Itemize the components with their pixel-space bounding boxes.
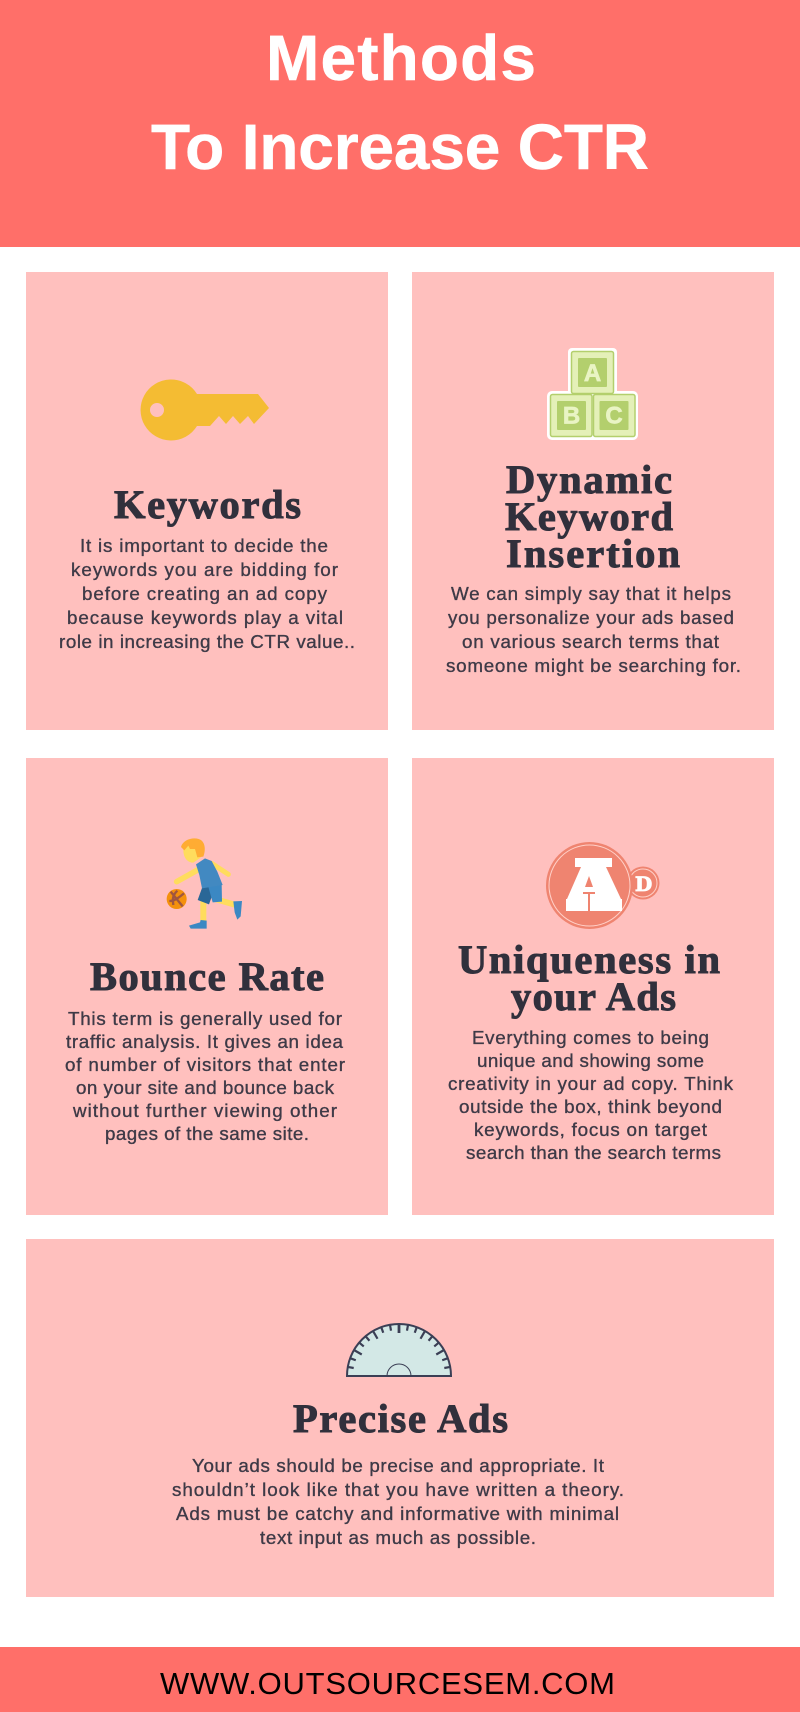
footer website: WWW.OUTSOURCESEM.COM: [160, 1666, 615, 1701]
heading: Dynamic Keyword Insertion: Dynamic: [506, 457, 672, 502]
text: uniqueness description: Everything comes to being: [472, 1027, 709, 1048]
text: bounce rate description: pages of the same site.: [105, 1123, 309, 1144]
text: keywords description: before creating an ad copy: [82, 583, 328, 604]
icon: key: [141, 379, 269, 440]
heading: Uniqueness in your Ads: Uniqueness in: [458, 937, 720, 982]
title: To Increase CTR: [151, 111, 649, 183]
title: Methods: [266, 22, 536, 94]
text: keywords description: It is important to decide the: [80, 535, 328, 556]
icon: ABC blocks: A: [584, 360, 601, 387]
heading: Uniqueness in your Ads: your Ads: [511, 974, 676, 1019]
text: uniqueness description: creativity in your ad copy. Think: [448, 1073, 734, 1094]
text: bounce rate description: [65, 1008, 345, 1144]
heading: Bounce Rate: Bounce Rate: [90, 954, 324, 999]
icon: Ad badge: D: [635, 872, 652, 896]
heading: Keywords: Keywords: [114, 482, 301, 527]
text: keywords description: [59, 535, 355, 652]
text: keywords description: role in increasing the CTR value..: [59, 631, 355, 652]
header banner: [0, 0, 800, 247]
panel: keywords: [26, 272, 388, 730]
icon: ABC blocks: C: [605, 402, 623, 430]
panel: uniqueness in your ads: [412, 758, 774, 1215]
icon: basketball player: [167, 838, 242, 929]
icon: protractor: [347, 1324, 451, 1376]
text: uniqueness description: outside the box, think beyond: [459, 1096, 722, 1117]
text: bounce rate description: of number of visitors that enter: [65, 1054, 345, 1075]
footer banner: [0, 1647, 800, 1712]
text: uniqueness description: search than the search terms: [466, 1142, 721, 1163]
text: uniqueness description: [448, 1027, 734, 1163]
text: dynamic keyword description: [446, 583, 741, 676]
text: keywords description: keywords you are bidding for: [71, 559, 338, 580]
text: dynamic keyword description: you personalize your ads based: [448, 607, 734, 628]
text: keywords description: because keywords play a vital: [67, 607, 343, 628]
text: precise ads description: Your ads should be precise and appropriate. It: [192, 1455, 605, 1476]
heading: Dynamic Keyword Insertion: Insertion: [506, 531, 680, 576]
text: uniqueness description: keywords, focus on target: [474, 1119, 708, 1140]
panel: bounce rate: [26, 758, 388, 1215]
text: dynamic keyword description: someone might be searching for.: [446, 655, 741, 676]
text: bounce rate description: on your site and bounce back: [76, 1077, 335, 1098]
text: bounce rate description: without further viewing other: [72, 1100, 337, 1121]
heading: Dynamic Keyword Insertion: [505, 457, 680, 576]
icon: ABC blocks: B: [563, 402, 580, 430]
icon: ABC blocks: [547, 348, 638, 440]
heading: Precise Ads: Precise Ads: [293, 1396, 508, 1441]
text: bounce rate description: This term is generally used for: [68, 1008, 342, 1029]
text: dynamic keyword description: We can simply say that it helps: [451, 583, 731, 604]
text: precise ads description: [172, 1455, 624, 1548]
text: precise ads description: shouldn’t look like that you have written a theory.: [172, 1479, 624, 1500]
panel: dynamic keyword insertion: [412, 272, 774, 730]
text: precise ads description: text input as much as possible.: [260, 1527, 536, 1548]
panel: precise ads: [26, 1239, 774, 1597]
text: bounce rate description: traffic analysis. It gives an idea: [66, 1031, 344, 1052]
text: precise ads description: Ads must be catchy and informative with minimal: [176, 1503, 619, 1524]
title: [151, 22, 649, 183]
text: dynamic keyword description: on various search terms that: [462, 631, 720, 652]
icon: Ad badge: A: [566, 844, 623, 927]
heading: Uniqueness in your Ads: [458, 937, 720, 1019]
heading: Dynamic Keyword Insertion: Keyword: [505, 494, 673, 539]
text: uniqueness description: unique and showing some: [477, 1050, 704, 1071]
icon: Ad badge: [546, 842, 660, 929]
